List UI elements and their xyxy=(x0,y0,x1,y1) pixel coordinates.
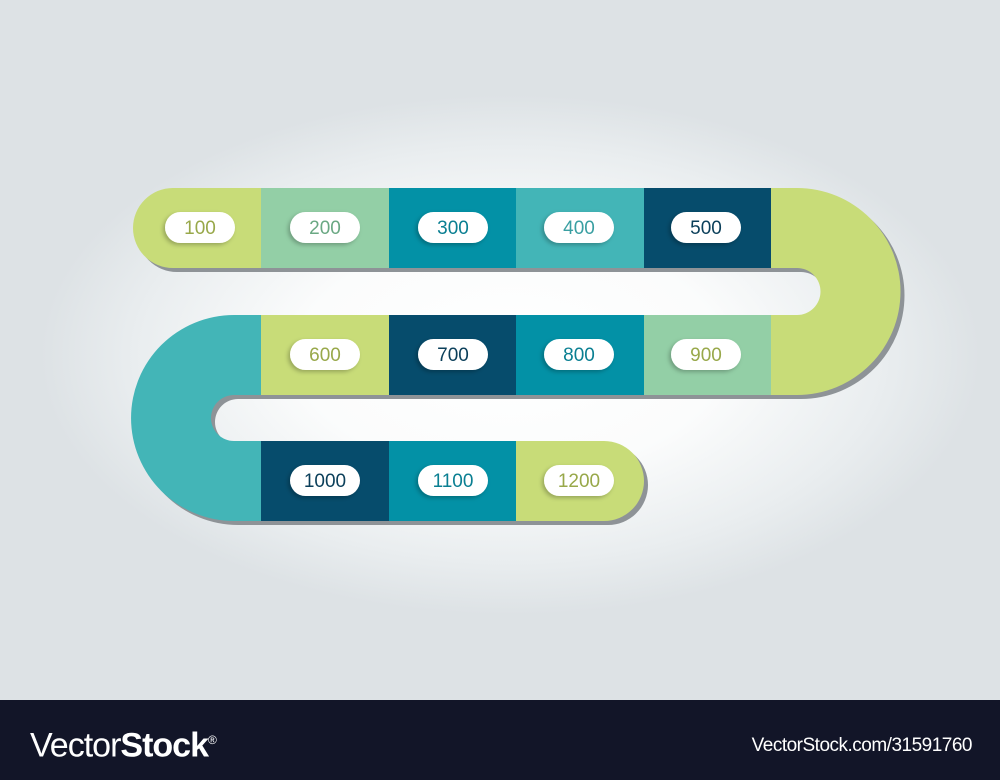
footer xyxy=(0,700,1000,780)
label 800 xyxy=(544,339,614,370)
footer logo: VectorStock® xyxy=(30,726,216,764)
label 900 xyxy=(671,339,741,370)
label 1000 xyxy=(290,465,360,496)
label 400 xyxy=(544,212,614,243)
label 700 xyxy=(418,339,488,370)
shadow band xyxy=(135,192,904,525)
row 2 xyxy=(261,315,771,395)
label 1100 xyxy=(418,465,488,496)
label 600 xyxy=(290,339,360,370)
label 100 xyxy=(165,212,235,243)
label 500 xyxy=(671,212,741,243)
label 1100: 1100 xyxy=(433,471,473,492)
label 200 xyxy=(290,212,360,243)
label 600: 600 xyxy=(309,345,341,366)
row 1 xyxy=(133,188,771,268)
right U-turn xyxy=(771,188,900,395)
label 300: 300 xyxy=(437,218,469,239)
label 100: 100 xyxy=(184,218,216,239)
label 800: 800 xyxy=(563,345,595,366)
label 500: 500 xyxy=(690,218,722,239)
row 3 xyxy=(261,441,644,521)
label 900: 900 xyxy=(690,345,722,366)
label 200: 200 xyxy=(309,218,341,239)
label 1000: 1000 xyxy=(304,471,346,492)
label 700: 700 xyxy=(437,345,469,366)
label 1200 xyxy=(544,465,614,496)
left U-turn xyxy=(131,315,261,521)
footer url: VectorStock.com/31591760 xyxy=(752,735,972,756)
labels xyxy=(165,212,741,496)
label 400: 400 xyxy=(563,218,595,239)
label 300 xyxy=(418,212,488,243)
label 1200: 1200 xyxy=(558,471,600,492)
